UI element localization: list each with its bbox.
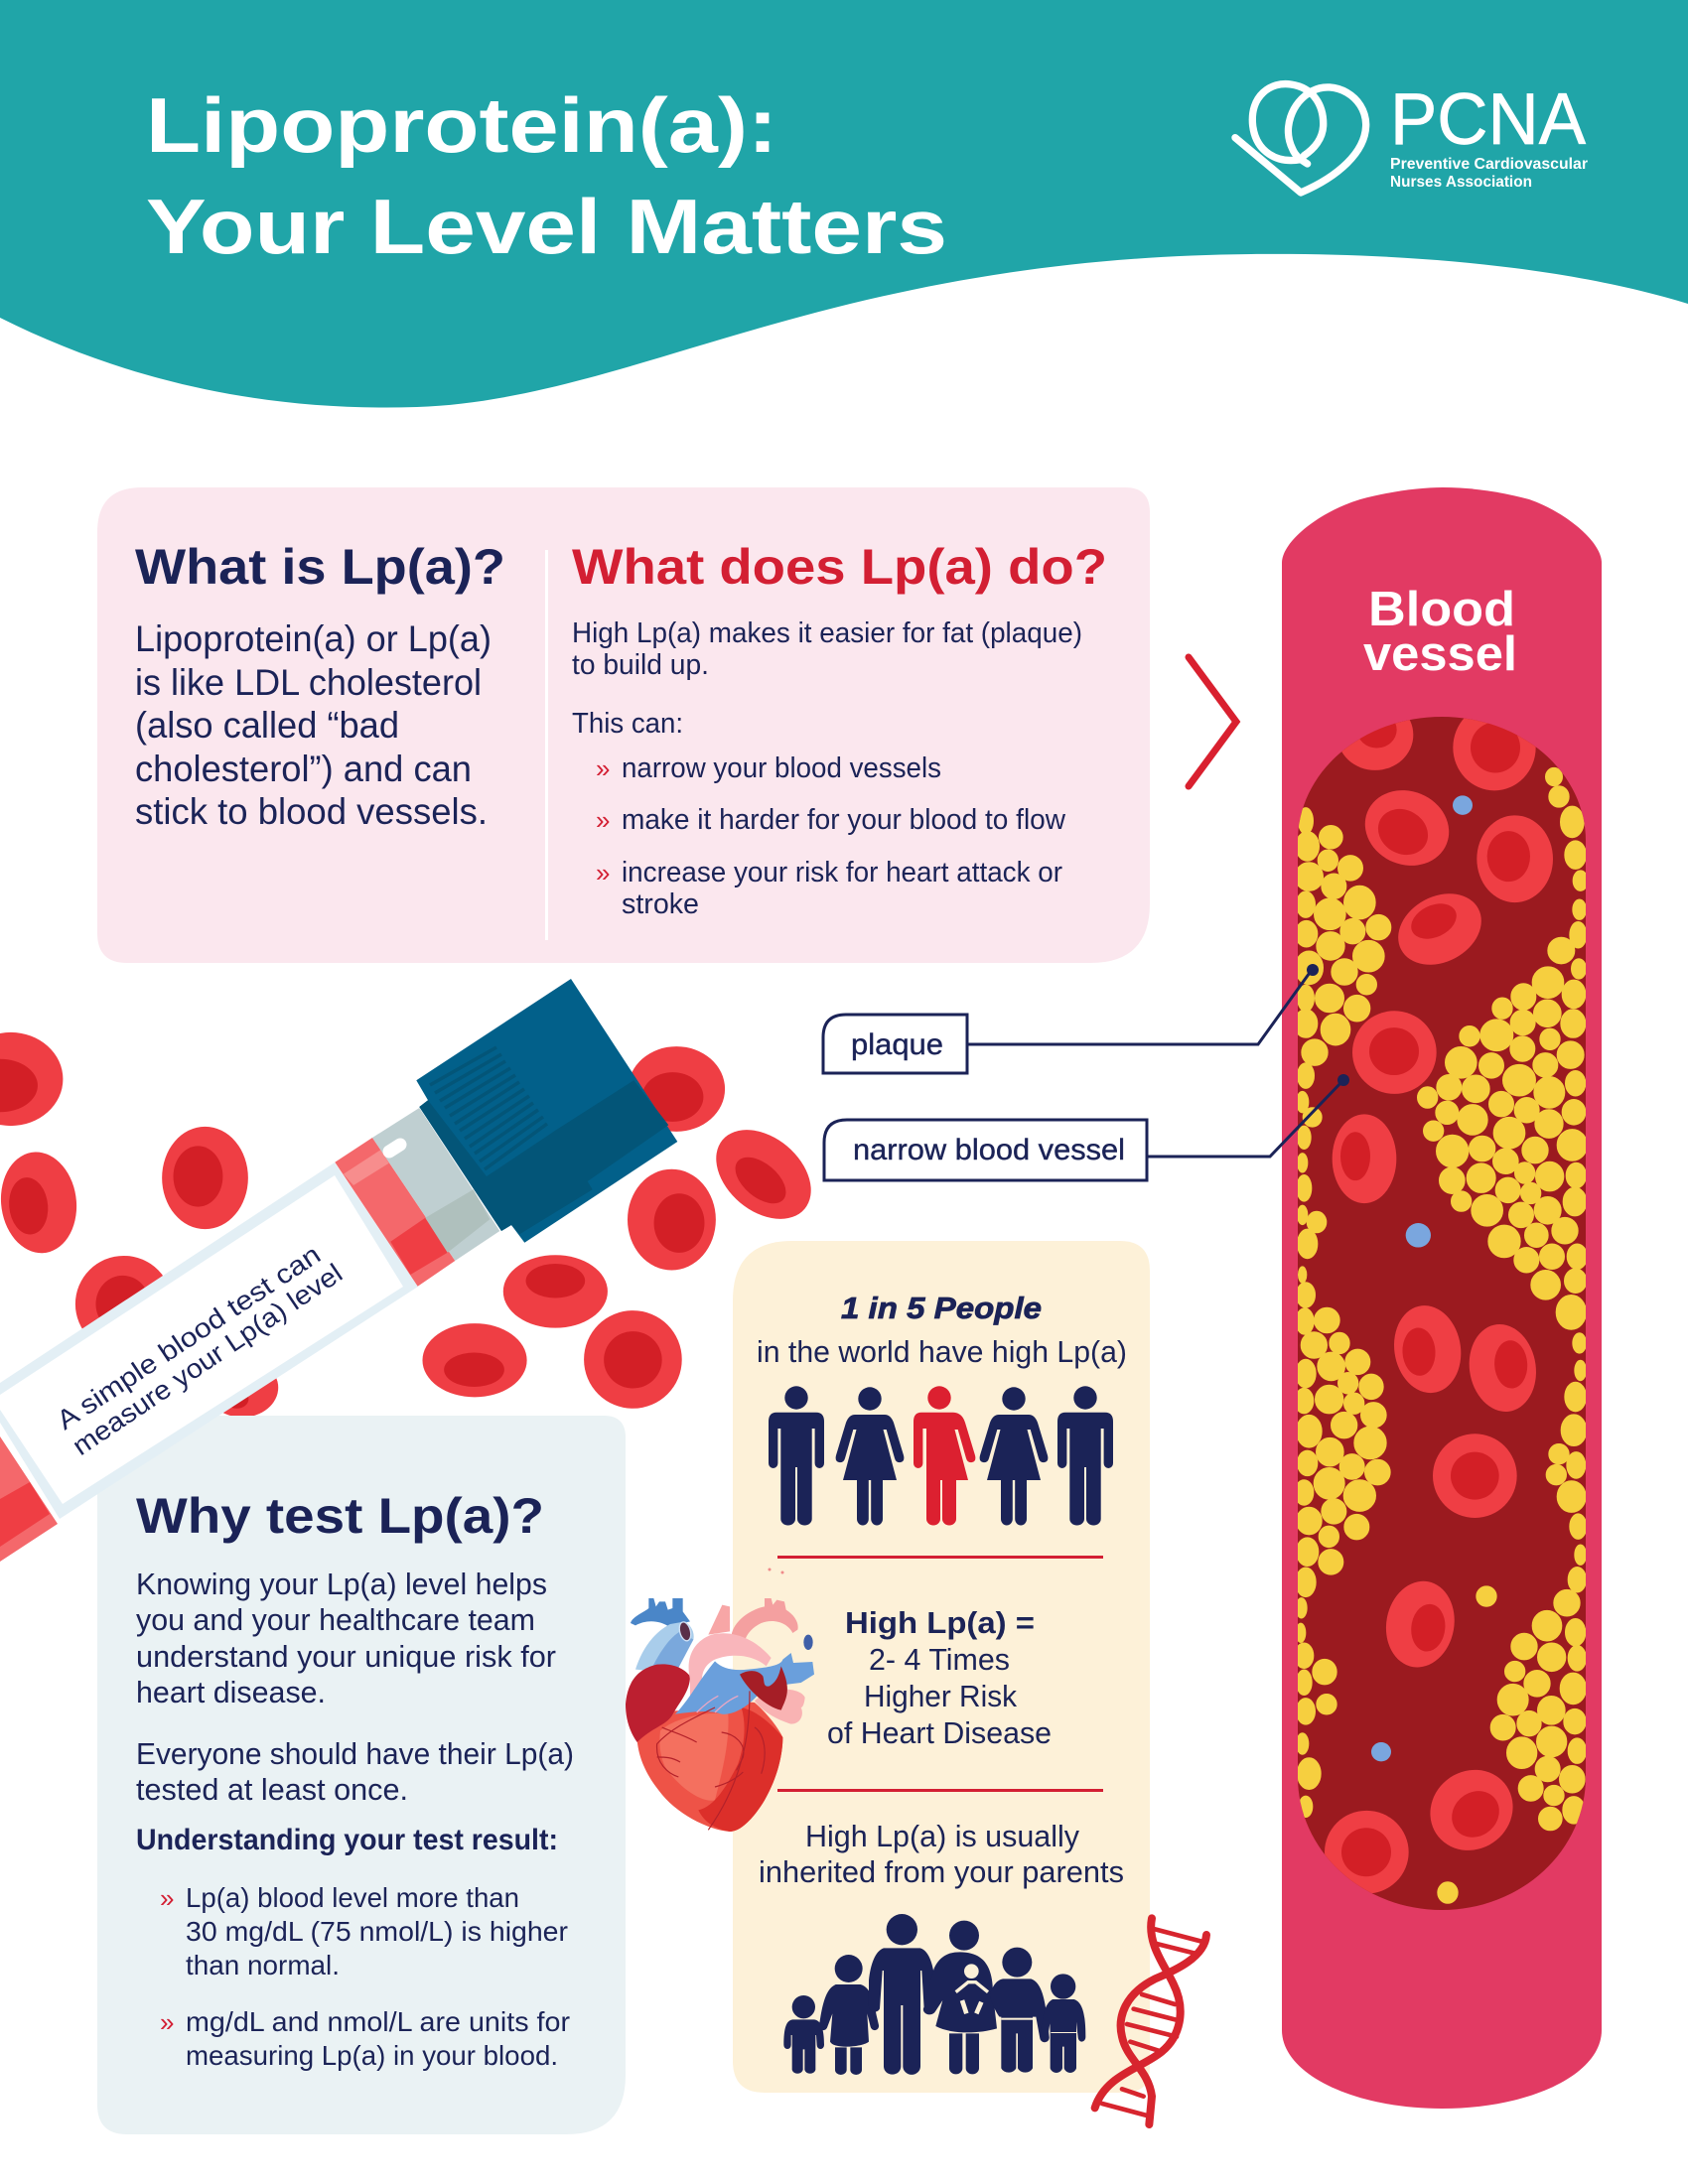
heading: What is Lp(a)?: What is Lp(a)? bbox=[135, 539, 505, 595]
text: reasons to test: you and your healthcare team bbox=[136, 1602, 535, 1637]
text: definition of Lp(a): stick to blood vessels. bbox=[135, 791, 488, 832]
text: blood test label: measure your Lp(a) level bbox=[68, 1258, 348, 1461]
callout: plaque bbox=[823, 964, 1319, 1073]
icon: family bbox=[783, 1914, 1085, 2075]
bullets: » bbox=[160, 2007, 174, 2037]
heading: Blood vessel: Blood bbox=[1368, 583, 1515, 636]
text: high Lp(a) risk: 2- 4 Times bbox=[869, 1642, 1010, 1677]
panel: why test Lp(a) bbox=[97, 1416, 626, 2134]
text: high Lp(a) risk: High Lp(a) = bbox=[845, 1605, 1035, 1640]
logo: PCNA: Nurses Association bbox=[1390, 174, 1532, 191]
icon: heart bbox=[626, 1598, 814, 1832]
text: definition of Lp(a): cholesterol”) and can bbox=[135, 749, 472, 789]
text: blood test label: A simple blood test can bbox=[52, 1239, 326, 1435]
text: what Lp(a) does: increase your risk for heart attack or bbox=[622, 857, 1062, 888]
logo: PCNA: PCNA bbox=[1390, 79, 1586, 160]
text: definition of Lp(a): Lipoprotein(a) or Lp(a) bbox=[135, 618, 492, 659]
text: reasons to test: understand your unique risk for bbox=[136, 1639, 556, 1674]
text: test result bullets: 30 mg/dL (75 nmol/L) is higher bbox=[186, 1916, 568, 1947]
text: reasons to test: Everyone should have their Lp(a) bbox=[136, 1736, 574, 1771]
text: what Lp(a) does: This can: bbox=[572, 708, 683, 740]
logo: PCNA bbox=[1235, 79, 1588, 193]
bullets bbox=[160, 1883, 174, 2037]
heading: What does Lp(a) do?: What does Lp(a) do? bbox=[572, 539, 1107, 595]
text: 1 in 5 people bbox=[757, 1291, 1127, 1369]
text: test result bullets bbox=[186, 1882, 570, 2071]
text: 1 in 5 people: 1 in 5 People bbox=[841, 1291, 1042, 1325]
text: inherited: High Lp(a) is usually bbox=[805, 1819, 1079, 1853]
text: reasons to test: tested at least once. bbox=[136, 1772, 408, 1807]
heading: Why test Lp(a)?: Why test Lp(a)? bbox=[136, 1488, 544, 1544]
red blood cells behind test tube bbox=[0, 1032, 828, 1418]
decorative specks near heart bbox=[769, 1569, 784, 1574]
bullets: » bbox=[160, 1883, 174, 1913]
text: definition of Lp(a): (also called “bad bbox=[135, 705, 399, 746]
bullets: » bbox=[596, 858, 610, 887]
test tube bbox=[0, 979, 677, 1562]
blood vessel illustration bbox=[1282, 487, 1602, 2109]
title: Your Level Matters bbox=[146, 183, 947, 270]
text: test result bullets: mg/dL and nmol/L are units for bbox=[186, 2006, 570, 2037]
text: test result bullets: measuring Lp(a) in your blood. bbox=[186, 2040, 558, 2071]
bullets: » bbox=[596, 805, 610, 835]
text: high Lp(a) risk: Higher Risk bbox=[864, 1679, 1017, 1713]
text: what Lp(a) does: narrow your blood vessels bbox=[622, 752, 941, 784]
heading: Blood vessel: vessel bbox=[1363, 627, 1517, 681]
text: high Lp(a) risk: of Heart Disease bbox=[827, 1715, 1052, 1750]
title bbox=[146, 81, 947, 270]
text: what Lp(a) does: to build up. bbox=[572, 649, 709, 681]
bullets: » bbox=[596, 753, 610, 783]
text: what Lp(a) does: stroke bbox=[622, 888, 699, 920]
text: reasons to test: heart disease. bbox=[136, 1675, 326, 1709]
text: what Lp(a) does: High Lp(a) makes it easier for fat (plaque) bbox=[572, 617, 1082, 649]
text: what Lp(a) does bbox=[572, 617, 1082, 920]
text: inherited: inherited from your parents bbox=[759, 1854, 1124, 1889]
callout: narrow blood vessel bbox=[824, 1074, 1349, 1180]
callout: narrow blood vessel: narrow blood vessel bbox=[853, 1134, 1125, 1166]
subheading: understanding your test result: Understanding your test result: bbox=[136, 1824, 558, 1856]
icons: five people, one in red bbox=[769, 1386, 1113, 1526]
text: 1 in 5 people: in the world have high Lp(a) bbox=[757, 1334, 1127, 1369]
icon: DNA helix bbox=[1095, 1918, 1206, 2124]
panel: statistics bbox=[733, 1241, 1150, 2093]
vessel lumen with cells and plaque bbox=[1291, 699, 1599, 1916]
panel: what is Lp(a) and what does it do bbox=[97, 487, 1150, 963]
header banner bbox=[0, 0, 1688, 408]
bullets bbox=[596, 753, 610, 887]
text: inherited bbox=[759, 1819, 1124, 1889]
text: test result bullets: Lp(a) blood level more than bbox=[186, 1882, 519, 1913]
title: Lipoprotein(a): bbox=[146, 81, 777, 169]
logo: PCNA: Preventive Cardiovascular bbox=[1390, 156, 1588, 173]
heading: Blood vessel bbox=[1363, 583, 1517, 681]
text: what Lp(a) does: make it harder for your blood to flow bbox=[622, 804, 1066, 836]
text: high Lp(a) risk bbox=[827, 1605, 1052, 1750]
text: reasons to test: Knowing your Lp(a) level helps bbox=[136, 1567, 547, 1601]
text: definition of Lp(a): is like LDL cholesterol bbox=[135, 662, 482, 703]
callout: plaque: plaque bbox=[851, 1028, 943, 1061]
arrow: chevron to blood vessel bbox=[1189, 657, 1236, 786]
text: definition of Lp(a) bbox=[135, 618, 492, 832]
text: test result bullets: than normal. bbox=[186, 1950, 340, 1980]
text: reasons to test bbox=[136, 1567, 574, 1807]
